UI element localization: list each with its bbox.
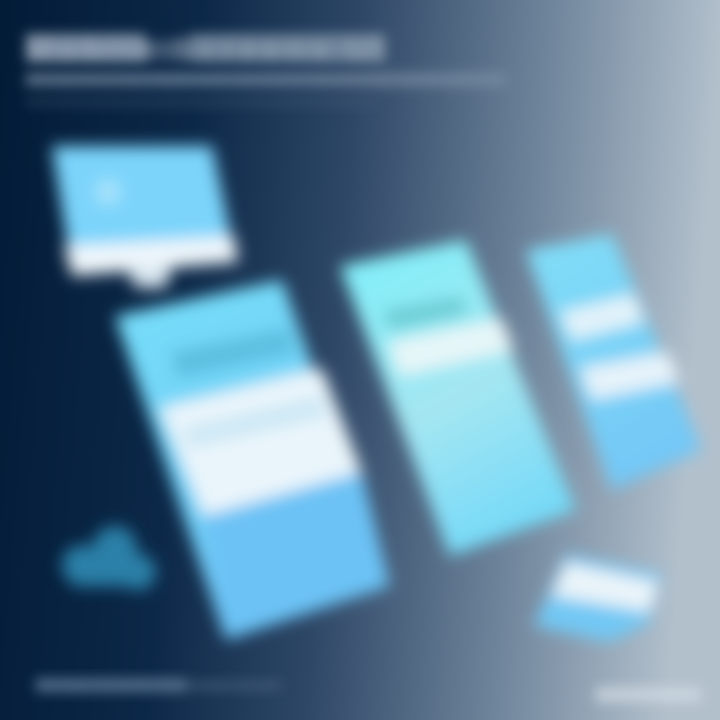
footer right text: Learn more [596,687,701,703]
small card white panel [552,562,658,612]
monitor screen highlight [95,179,121,205]
phone 2 header bar [382,296,468,330]
title: Mobile Screens UI [26,31,384,67]
monitor [52,146,238,288]
monitor bottom bezel [64,236,238,276]
subtitle [26,73,506,105]
subtitle: Responsive layouts across desktop and phone [26,73,506,88]
small card [534,554,662,642]
footer left text: Design system overview footer [36,678,282,693]
phone 1 [115,280,390,640]
monitor stand [126,266,172,288]
phone 3 first panel [560,294,644,340]
phone 2 white panel [388,318,514,376]
phone 3 [526,234,702,490]
icon: cloud [62,526,156,590]
phone 2 [340,240,576,556]
phone 1 panel mottling [182,396,328,448]
phone 1 lower panel [204,472,390,640]
phone 1 header bar [170,328,296,378]
phone 1 white panel [160,368,362,516]
phone 3 second panel [580,352,680,400]
